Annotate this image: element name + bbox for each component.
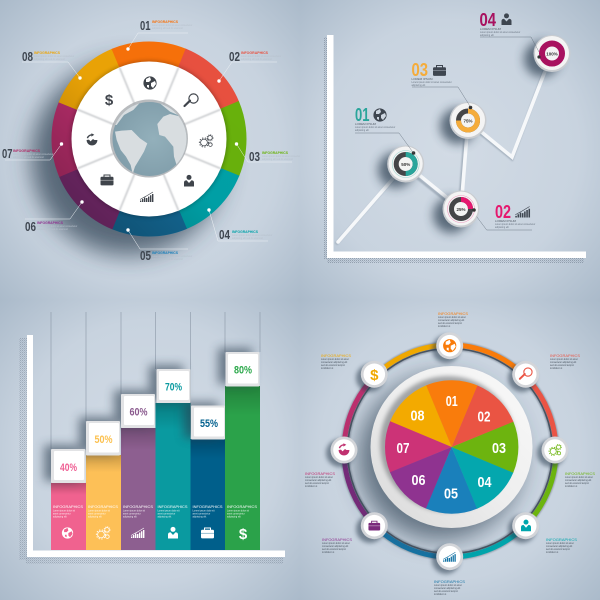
text block 07: sed do eiusmod tempor [305, 482, 329, 485]
label 02 [495, 202, 535, 229]
text block 01: sed do eiusmod tempor [438, 322, 462, 325]
icon: chart [140, 192, 153, 202]
bar 2 [86, 455, 121, 550]
label 04: adipiscing elit [480, 34, 494, 37]
chart axes [19, 335, 285, 564]
bar 6: $ [239, 526, 248, 543]
text block 02: INFOGRAPHICS [550, 354, 581, 358]
text block 03 [565, 472, 596, 488]
outer colour ring [300, 301, 600, 600]
node: refresh [330, 436, 358, 464]
text block 03: sed do eiusmod tempor [565, 482, 589, 485]
label 05 [140, 248, 192, 263]
label 08: INFOGRAPHICS [34, 51, 60, 55]
text block 08: consectetur adipiscing elit [321, 361, 348, 364]
label 07: adipiscing elit sed do eiusmod [13, 156, 44, 159]
icon: globe [143, 76, 157, 90]
text block 06 [322, 538, 353, 554]
label 01: 01 [355, 105, 370, 125]
text block 02 [550, 354, 581, 370]
label 02: INFOGRAPHICS [241, 51, 268, 55]
label 05: adipiscing elit sed do eiusmod [152, 258, 183, 261]
bar 5: adipiscing elit [192, 516, 207, 518]
text block 06: INFOGRAPHICS [322, 538, 353, 542]
text block 04: incididunt ut [546, 551, 559, 554]
node: person [512, 512, 539, 539]
square 50%: 50% [94, 434, 113, 446]
node 02: 25% donut: 25% [456, 207, 466, 212]
guide lines [51, 312, 260, 449]
label 08: adipiscing elit sed do eiusmod [34, 58, 65, 61]
pie labels: 06 [412, 472, 426, 489]
bar 2: amet consectetur [88, 512, 106, 516]
square 55% [191, 406, 225, 440]
bar 2: INFOGRAPHICS [88, 505, 119, 509]
text block 02: consectetur adipiscing elit [550, 361, 577, 364]
label 01: adipiscing elit [355, 129, 369, 132]
bar 6: adipiscing elit [227, 516, 241, 518]
bar 6: amet consectetur [227, 512, 245, 516]
text block 03: consectetur adipiscing elit [565, 479, 592, 482]
node 01: 50% donut: 50% [401, 162, 410, 167]
label 03: Lorem ipsum dolor sit amet consectetur [412, 81, 452, 84]
pie labels: 04 [478, 474, 492, 491]
label 06: INFOGRAPHICS [37, 221, 63, 225]
text block 04: Lorem ipsum dolor sit amet [546, 542, 574, 545]
wheel shadow [31, 61, 225, 255]
text block 01: Lorem ipsum dolor sit amet [438, 316, 466, 319]
white icon disc [70, 60, 228, 218]
text block 06: Lorem ipsum dolor sit amet [322, 542, 350, 545]
node 01: 50% donut [378, 146, 424, 188]
label 05: INFOGRAPHICS [152, 251, 178, 255]
label 03: INFOGRAPHICS [262, 151, 288, 155]
label 04 [219, 227, 272, 242]
icon: briefcase [100, 175, 114, 185]
leader lines and dots [5, 33, 292, 249]
icon: magnifier [184, 94, 198, 106]
label 08: Lorem ipsum dolor sit amet consectetur [34, 55, 74, 58]
bar 1: adipiscing elit [53, 516, 67, 518]
label 01: INFOGRAPHICS [152, 20, 178, 24]
text block 07: INFOGRAPHICS [305, 472, 336, 476]
square 40% [51, 449, 86, 483]
text block 08: Lorem ipsum dolor sit amet [321, 358, 349, 361]
text block 03: incididunt ut [565, 485, 578, 488]
label 01 [355, 105, 395, 132]
icon: refresh [87, 133, 97, 145]
bar 5: INFOGRAPHICS [192, 505, 223, 509]
pie labels: 07 [396, 440, 410, 457]
bar 1 [51, 483, 86, 550]
segmented colour ring [35, 25, 263, 253]
text block 01: INFOGRAPHICS [438, 312, 469, 316]
label 02: 02 [229, 49, 240, 64]
bar 6: Lorem ipsum dolor sit [227, 510, 249, 512]
pie labels [396, 393, 506, 502]
square 80%: 80% [234, 364, 252, 376]
node 03: 75% donut: 75% [463, 118, 473, 124]
bar 5 [190, 439, 225, 550]
label 02: adipiscing elit sed do eiusmod [241, 58, 272, 61]
square 55%: 55% [200, 418, 218, 430]
bar 2: adipiscing elit [88, 516, 102, 518]
label 06: 06 [25, 219, 36, 234]
pie labels: 05 [444, 486, 458, 502]
white disc [358, 366, 532, 540]
pie labels: 01 [446, 393, 458, 410]
bar 4: Lorem ipsum dolor sit [158, 510, 180, 512]
text block 02: Lorem ipsum dolor sit amet [550, 358, 578, 361]
pie labels: 02 [478, 408, 490, 426]
node 03: 75% donut [440, 102, 486, 144]
label 08 [22, 49, 74, 64]
label 03: LOREM IPSUM [412, 77, 433, 81]
label 07: 07 [2, 146, 12, 161]
text block 08 [321, 354, 352, 370]
node: briefcase [361, 512, 388, 539]
node: dollar: $ [370, 367, 379, 384]
label 03 [412, 60, 452, 87]
node: dollar [361, 361, 388, 388]
bar 3 [121, 428, 156, 550]
label 04: adipiscing elit sed do eiusmod [232, 237, 263, 240]
text block 06: consectetur adipiscing elit [322, 545, 349, 548]
label 07: Lorem ipsum dolor sit amet consectetur [13, 153, 53, 156]
label 03: 03 [412, 60, 428, 80]
text block 02: sed do eiusmod tempor [550, 364, 574, 367]
bar 5: Lorem ipsum dolor sit [192, 510, 215, 512]
icon: person [184, 175, 194, 186]
icon: gears [199, 135, 213, 147]
label 06: adipiscing elit sed do eiusmod [37, 228, 68, 231]
label 02: 02 [495, 202, 511, 222]
label 04: Lorem ipsum dolor sit amet consectetur [232, 234, 272, 237]
bar 4: amet consectetur [158, 512, 175, 516]
square 40%: 40% [60, 462, 77, 474]
node: globe [436, 332, 463, 359]
bar 1: amet consectetur [53, 512, 71, 516]
node: magnifier [512, 361, 539, 388]
label 04: Lorem ipsum dolor sit amet consectetur [480, 31, 520, 34]
bar 3: amet consectetur [123, 512, 141, 516]
square 60% [121, 394, 155, 428]
square shadows [44, 348, 252, 481]
bar 4: INFOGRAPHICS [158, 505, 188, 509]
text block 07 [305, 472, 336, 488]
text block 05: INFOGRAPHICS [434, 580, 466, 584]
bar 2: Lorem ipsum dolor sit [88, 510, 110, 512]
text block 05: incididunt ut [434, 593, 447, 596]
bar 4 [156, 403, 190, 550]
label 02: Lorem ipsum dolor sit amet consectetur [241, 55, 281, 58]
label 02: LOREM IPSUM [495, 219, 517, 223]
label 01: Lorem ipsum dolor sit amet consectetur [152, 24, 192, 27]
bar 3: adipiscing elit [123, 516, 137, 518]
label 01: adipiscing elit sed do eiusmod [152, 27, 183, 30]
bar 1: INFOGRAPHICS [53, 505, 84, 509]
bar 4: adipiscing elit [158, 516, 172, 518]
text block 07: consectetur adipiscing elit [305, 479, 332, 482]
text block 07: incididunt ut [305, 485, 318, 488]
trend line [336, 53, 552, 244]
text block 04: sed do eiusmod tempor [546, 548, 570, 551]
panel: pie ring infographic [300, 300, 600, 600]
square 70%: 70% [165, 382, 182, 394]
bar 1: Lorem ipsum dolor sit [53, 510, 75, 512]
label 01: Lorem ipsum dolor sit amet consectetur [355, 126, 395, 129]
label 02: adipiscing elit [495, 226, 509, 229]
text block 05: sed do eiusmod tempor [434, 590, 458, 593]
chart axes [324, 35, 586, 263]
node 04: 100% donut [524, 35, 570, 77]
text block 04 [546, 538, 578, 554]
bar 3: INFOGRAPHICS [123, 505, 154, 509]
label 01: 01 [140, 18, 150, 33]
text block 03: INFOGRAPHICS [565, 472, 596, 476]
label 03 [249, 149, 302, 164]
label 04: 04 [480, 10, 496, 30]
text block 06: sed do eiusmod tempor [322, 548, 346, 551]
bar 6: INFOGRAPHICS [227, 505, 258, 509]
panel: wheel infographic [0, 0, 302, 300]
icon: dollar: $ [105, 92, 114, 109]
panel: line chart [300, 0, 600, 300]
bar 6 [225, 386, 260, 550]
text block 05: consectetur adipiscing elit [434, 587, 461, 590]
label 02: Lorem ipsum dolor sit amet consectetur [495, 223, 535, 226]
bar 5: amet consectetur [192, 512, 210, 516]
text block 08: incididunt ut [321, 367, 334, 370]
label 03: adipiscing elit sed do eiusmod [262, 158, 293, 161]
label 04: 04 [219, 227, 231, 242]
label 06 [25, 219, 77, 234]
text block 05: Lorem ipsum dolor sit amet [434, 584, 462, 587]
pie chart [408, 403, 495, 491]
label 02 [229, 49, 281, 64]
label 04: INFOGRAPHICS [232, 230, 258, 234]
bar 3: Lorem ipsum dolor sit [123, 510, 145, 512]
text block 08: sed do eiusmod tempor [321, 364, 345, 367]
node 04: 100% donut: 100% [546, 52, 558, 56]
node: gears [542, 436, 568, 464]
label 08: 08 [22, 49, 33, 64]
label 01: LOREM IPSUM [355, 122, 377, 126]
text block 04: consectetur adipiscing elit [546, 545, 573, 548]
text block 08: INFOGRAPHICS [321, 354, 352, 358]
text block 06: incididunt ut [322, 551, 335, 554]
label 01 [140, 18, 192, 33]
text block 03: Lorem ipsum dolor sit amet [565, 476, 593, 479]
label 03: 03 [249, 149, 260, 164]
label 03: adipiscing elit [412, 84, 426, 87]
node shadows [326, 335, 565, 574]
label 07 [2, 146, 53, 161]
label 06: Lorem ipsum dolor sit amet consectetur [37, 225, 77, 228]
label 05: Lorem ipsum dolor sit amet consectetur [152, 255, 192, 258]
text block 01: incididunt ut [438, 325, 451, 328]
square 80% [226, 352, 260, 386]
leader lines [355, 37, 539, 230]
label 03: Lorem ipsum dolor sit amet consectetur [262, 155, 302, 158]
text block 02: incididunt ut [550, 367, 563, 370]
text block 05 [434, 580, 466, 596]
square 70% [156, 369, 190, 403]
pie labels: 03 [492, 440, 506, 457]
globe [110, 100, 189, 178]
pie labels: 08 [410, 408, 424, 424]
square 60%: 60% [130, 406, 148, 418]
label 07: INFOGRAPHICS [13, 149, 40, 153]
label 05: 05 [140, 248, 151, 263]
label 04: LOREM IPSUM [480, 27, 502, 31]
text block 04: INFOGRAPHICS [546, 538, 578, 542]
label 04 [480, 10, 520, 37]
node 02: 25% donut [433, 190, 480, 233]
square 50% [86, 421, 120, 456]
text block 07: Lorem ipsum dolor sit amet [305, 476, 333, 479]
panel: bar chart [0, 300, 300, 600]
text block 01: consectetur adipiscing elit [438, 319, 465, 322]
node: chart [436, 543, 463, 570]
text block 01 [438, 312, 469, 328]
